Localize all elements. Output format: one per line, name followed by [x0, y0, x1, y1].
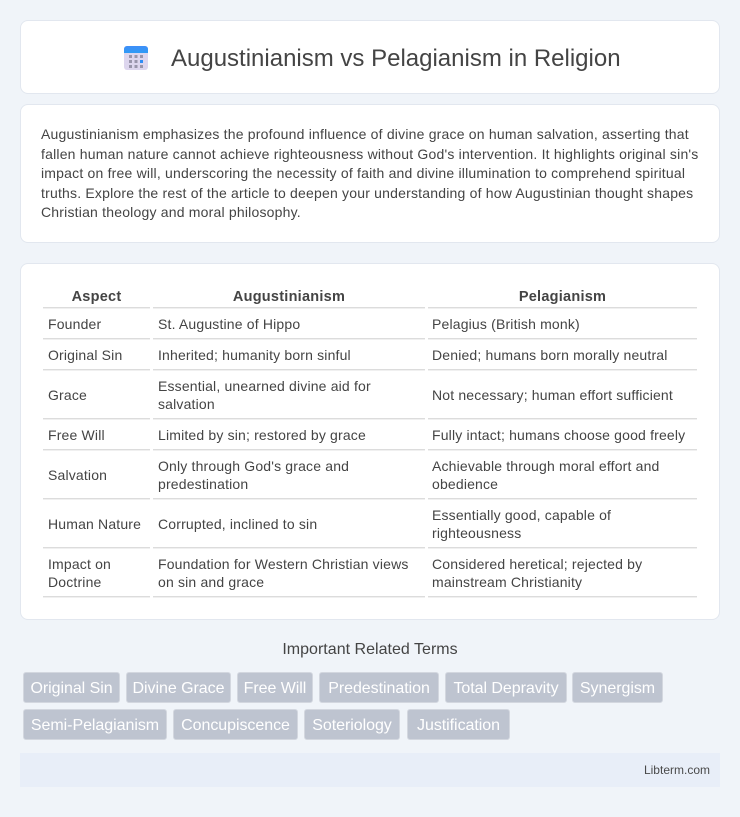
comparison table panel — [20, 263, 720, 620]
tag — [407, 709, 510, 740]
row: Salvation: obedience — [432, 476, 498, 492]
row: Impact on Doctrine — [43, 556, 697, 598]
row: Human Nature — [43, 507, 697, 549]
tag: Free Will — [244, 680, 306, 697]
tag — [572, 672, 663, 703]
row: Impact on Doctrine: mainstream Christianity — [432, 574, 582, 590]
row: Free Will: Limited by sin; restored by grace — [158, 427, 366, 443]
intro panel — [20, 104, 720, 243]
tag: Semi-Pelagianism — [31, 717, 159, 734]
row: Free Will: Fully intact; humans choose good freely — [432, 427, 685, 443]
intro text: fallen human nature cannot achieve righteousness without God's intervention. It highlights original sin's — [41, 146, 699, 162]
footer bar — [20, 753, 720, 787]
row: Grace: Not necessary; human effort sufficient — [432, 387, 673, 403]
row: Grace — [43, 378, 697, 420]
row: Human Nature: Corrupted, inclined to sin — [158, 516, 317, 532]
tag — [23, 709, 167, 740]
row: Salvation: Achievable through moral effort and — [432, 458, 660, 474]
row: Grace: Essential, unearned divine aid for — [158, 378, 371, 394]
icon: calendar — [124, 46, 148, 70]
tag: Divine Grace — [133, 680, 224, 697]
title: Augustinianism vs Pelagianism in Religion — [171, 45, 621, 72]
row: Founder: Founder — [48, 316, 101, 332]
row: Original Sin: Inherited; humanity born sinful — [158, 347, 351, 363]
row: Impact on Doctrine: Doctrine — [48, 574, 102, 590]
related terms heading: Important Related Terms — [282, 641, 458, 658]
tag: Justification — [417, 717, 500, 734]
row: Founder: Pelagius (British monk) — [432, 316, 580, 332]
footer credit: Libterm.com — [644, 763, 710, 777]
tag: Concupiscence — [181, 717, 290, 734]
related terms tags — [23, 672, 663, 740]
row: Salvation: predestination — [158, 476, 248, 492]
tag — [23, 672, 120, 703]
row: Original Sin: Denied; humans born morally neutral — [432, 347, 668, 363]
row: Impact on Doctrine: Considered heretical; rejected by — [432, 556, 642, 572]
header row: Augustinianism — [233, 289, 345, 305]
intro text: impact on free will, underscoring the necessity of faith and divine illumination to comprehend spiritual — [41, 165, 685, 181]
tag: Original Sin — [30, 680, 113, 697]
row: Founder: St. Augustine of Hippo — [158, 316, 300, 332]
row: Original Sin — [43, 347, 697, 371]
tag: Total Depravity — [453, 680, 559, 697]
tag — [319, 672, 439, 703]
tag: Synergism — [580, 680, 655, 697]
row: Human Nature: Human Nature — [48, 516, 141, 532]
tag — [304, 709, 400, 740]
row: Human Nature: Essentially good, capable of — [432, 507, 611, 523]
header row: Aspect — [72, 289, 121, 305]
row: Founder — [43, 316, 697, 340]
row: Impact on Doctrine: on sin and grace — [158, 574, 264, 590]
tag — [126, 672, 231, 703]
row: Human Nature: righteousness — [432, 525, 521, 541]
row: Grace: salvation — [158, 396, 215, 412]
intro text: Christian theology and moral philosophy. — [41, 204, 301, 220]
row: Grace: Grace — [48, 387, 87, 403]
header row — [43, 289, 697, 309]
intro text — [41, 126, 699, 220]
header card — [20, 20, 720, 94]
header row: Pelagianism — [519, 289, 606, 305]
row: Impact on Doctrine: Impact on — [48, 556, 111, 572]
tag — [237, 672, 313, 703]
row: Impact on Doctrine: Foundation for Western Christian views — [158, 556, 409, 572]
tag: Predestination — [328, 680, 430, 697]
tag — [445, 672, 567, 703]
intro text: Augustinianism emphasizes the profound influence of divine grace on human salvation, asserting that — [41, 126, 689, 142]
intro text: truths. Explore the rest of the article to deepen your understanding of how Augustinian thought shapes — [41, 184, 693, 200]
row: Salvation: Only through God's grace and — [158, 458, 349, 474]
tag — [173, 709, 298, 740]
row: Free Will — [43, 427, 697, 451]
row: Salvation — [43, 458, 697, 500]
tag: Soteriology — [312, 717, 392, 734]
row: Salvation: Salvation — [48, 467, 107, 483]
row: Original Sin: Original Sin — [48, 347, 122, 363]
row: Free Will: Free Will — [48, 427, 105, 443]
